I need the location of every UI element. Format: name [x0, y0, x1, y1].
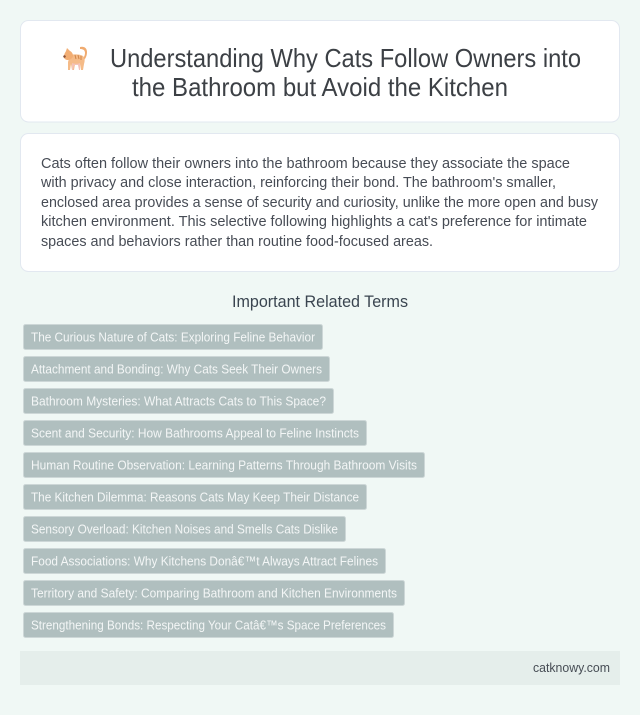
tag 5: Human Routine Observation: Learning Patterns Through Bathroom Visits: [31, 458, 417, 472]
tag 2: Attachment and Bonding: Why Cats Seek Their Owners: [31, 362, 322, 376]
tag 5: [24, 452, 424, 478]
description text: kitchen environment. This selective following highlights a cat's preference for intimate: [41, 213, 587, 230]
tag 10: [24, 612, 394, 638]
tag 4: [24, 420, 366, 446]
footer: [20, 651, 620, 685]
tag 8: Food Associations: Why Kitchens Donâ€™t Always Attract Felines: [31, 554, 378, 568]
tag 9: Territory and Safety: Comparing Bathroom and Kitchen Environments: [31, 586, 397, 600]
title text: [110, 43, 581, 102]
description text: Cats often follow their owners into the bathroom because they associate the space: [41, 155, 570, 172]
tag 8: [24, 548, 386, 574]
description text: spaces and behaviors rather than routine food-focused areas.: [41, 233, 433, 250]
heading: important related terms: Important Related Terms: [232, 293, 408, 311]
tag 3: [24, 388, 334, 414]
tag 4: Scent and Security: How Bathrooms Appeal to Feline Instincts: [31, 426, 359, 440]
tag 7: [24, 516, 346, 542]
description text: enclosed area provides a sense of security and curiosity, unlike the more open and busy: [41, 194, 598, 211]
tag 6: [24, 484, 366, 510]
panel: description: [20, 134, 620, 272]
description text: [40, 155, 598, 250]
panel: title card: [20, 20, 620, 122]
tag 9: [24, 580, 404, 606]
tag 10: Strengthening Bonds: Respecting Your Catâ€™s Space Preferences: [31, 618, 386, 632]
tag 3: Bathroom Mysteries: What Attracts Cats to This Space?: [31, 394, 326, 408]
footer source text: catknowy.com: [533, 660, 610, 675]
icon: cat: [63, 47, 87, 70]
title text: Understanding Why Cats Follow Owners into: [110, 43, 581, 73]
tag 6: The Kitchen Dilemma: Reasons Cats May Keep Their Distance: [31, 490, 359, 504]
title text: the Bathroom but Avoid the Kitchen: [132, 72, 508, 102]
tag list: [24, 324, 424, 638]
tag 2: [24, 356, 330, 382]
tag 1: The Curious Nature of Cats: Exploring Feline Behavior: [31, 330, 316, 344]
tag 7: Sensory Overload: Kitchen Noises and Smells Cats Dislike: [31, 522, 338, 536]
description text: with privacy and close interaction, reinforcing their bond. The bathroom's smaller,: [40, 174, 556, 191]
tag 1: [24, 324, 322, 350]
